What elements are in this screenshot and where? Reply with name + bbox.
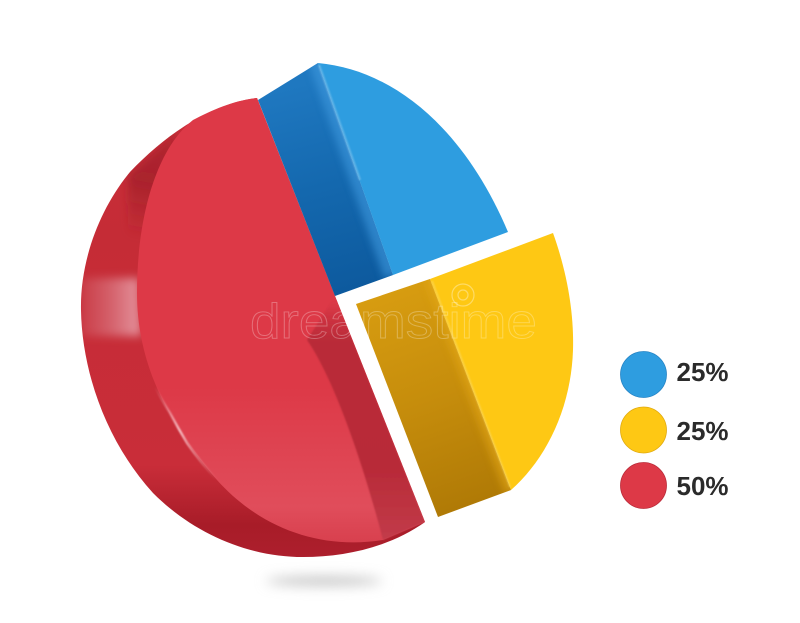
yellow slice side face — [356, 279, 511, 517]
ground shadow — [266, 576, 382, 586]
legend item: yellow 25% — [620, 407, 729, 453]
blue side glow — [316, 60, 392, 276]
legend — [620, 352, 729, 508]
red wall glare — [80, 278, 141, 336]
red rim highlight — [155, 387, 217, 480]
legend item: blue 25% — [620, 352, 729, 398]
yellow edge highlight — [432, 281, 510, 487]
yellow slice top face — [430, 233, 573, 490]
legend item: red 50%: 50% — [676, 471, 729, 501]
watermark swirl logo — [452, 284, 474, 306]
red slice cut face — [307, 296, 425, 540]
blue slice side face — [258, 63, 393, 296]
red slice outer wall — [81, 98, 425, 557]
blue slice top face — [318, 63, 508, 275]
slice: blue 25% — [258, 60, 508, 296]
legend item: blue 25%: 25% — [676, 357, 729, 387]
blue edge highlight — [319, 65, 360, 180]
slice: red 50% — [80, 98, 425, 557]
legend item: yellow 25%: 25% — [676, 416, 729, 446]
yellow side glow — [430, 276, 512, 492]
slice: yellow 25% — [356, 233, 573, 517]
watermark: dreamstime — [250, 295, 537, 349]
legend item: red 50% — [620, 462, 729, 508]
red wall shadow — [124, 130, 178, 221]
red slice top face — [137, 98, 425, 542]
infographic: 3D pie chart with legend — [80, 63, 728, 592]
